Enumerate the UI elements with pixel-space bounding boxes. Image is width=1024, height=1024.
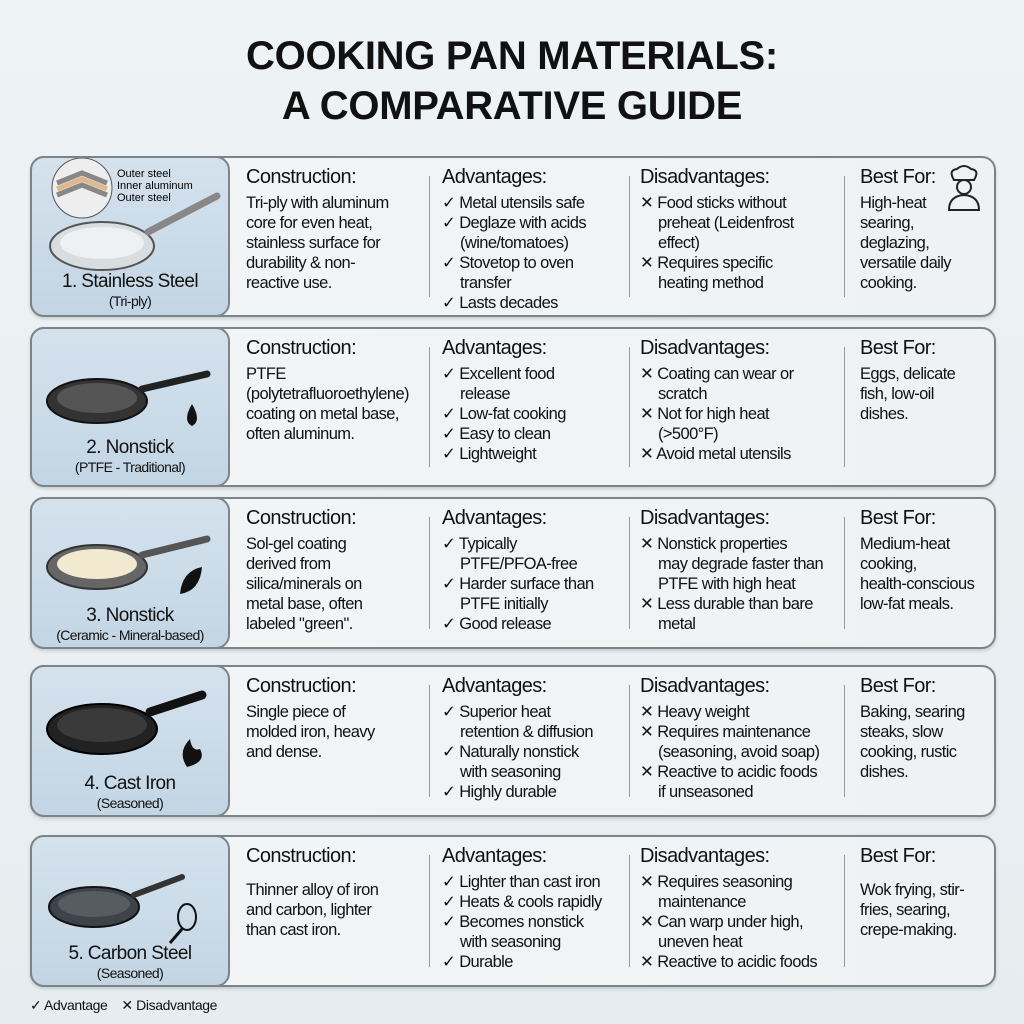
title: COOKING PAN MATERIALS: [246,34,778,78]
panel: nonstick PTFE: ✓ Low-fat cooking [442,405,566,423]
image: cast iron skillet: (Seasoned) [97,795,163,811]
panel: stainless steel: ✓ Stovetop to oven [442,254,573,272]
panel: nonstick PTFE: coating on metal base, [246,405,399,423]
image: carbon steel pan: 5. Carbon Steel [68,943,192,964]
panel: ceramic nonstick: Sol-gel coating [246,535,346,553]
panel: ceramic nonstick: ✓ Good release [442,615,551,633]
panel: nonstick PTFE: often aluminum. [246,425,354,443]
panel: cast iron: molded iron, heavy [246,723,375,741]
image: ceramic pan [30,497,230,649]
panel: carbon steel: maintenance [658,893,746,911]
panel: stainless steel: Advantages: [442,166,547,188]
panel: ceramic nonstick: PTFE with high heat [658,575,795,593]
image: stainless pan: 1. Stainless Steel [62,271,198,292]
panel: ceramic nonstick: metal base, often [246,595,362,613]
panel: cast iron: Construction: [246,675,356,697]
icon: chef [948,165,980,211]
panel: stainless steel: core for even heat, [246,214,372,232]
panel: stainless steel: transfer [460,274,511,292]
panel: ceramic nonstick: ✕ Less durable than bare [640,595,813,613]
panel: ceramic nonstick: PTFE initially [460,595,548,613]
image: ceramic pan: 3. Nonstick [86,605,174,626]
panel: cast iron: retention & diffusion [460,723,593,741]
panel: ceramic nonstick: Medium-heat [860,535,950,553]
panel: ceramic nonstick: Disadvantages: [640,507,769,529]
panel: nonstick PTFE: scratch [658,385,707,403]
panel: carbon steel: ✓ Durable [442,953,513,971]
panel: carbon steel [30,835,996,987]
panel: nonstick PTFE [30,327,996,487]
image: stainless pan: (Tri-ply) [109,293,151,309]
panel: ceramic nonstick: cooking, [860,555,917,573]
panel: carbon steel: and carbon, lighter [246,901,371,919]
panel: cast iron: cooking, rustic [860,743,956,761]
title: A COMPARATIVE GUIDE [282,84,742,128]
panel: cast iron: ✕ Heavy weight [640,703,749,721]
image: stainless pan: Outer steel [117,168,171,180]
panel: ceramic nonstick: ✓ Harder surface than [442,575,594,593]
panel: stainless steel: Best For: [860,166,936,188]
panel: carbon steel: than cast iron. [246,921,341,939]
panel: carbon steel: ✕ Can warp under high, [640,913,803,931]
panel: carbon steel: fries, searing, [860,901,950,919]
panel: ceramic nonstick: Construction: [246,507,356,529]
panel: stainless steel: durability & non- [246,254,355,272]
panel: stainless steel: cooking. [860,274,917,292]
panel: carbon steel: Disadvantages: [640,845,769,867]
panel: stainless steel: ✕ Requires specific [640,254,773,272]
panel: ceramic nonstick: low-fat meals. [860,595,953,613]
panel: nonstick PTFE: ✕ Coating can wear or [640,365,793,383]
panel: nonstick PTFE: Advantages: [442,337,547,359]
panel: cast iron: and dense. [246,743,322,761]
panel: ceramic nonstick: labeled "green". [246,615,353,633]
panel: cast iron: (seasoning, avoid soap) [658,743,819,761]
panel: nonstick PTFE: release [460,385,510,403]
image: stainless pan: Outer steel [117,192,171,204]
panel: cast iron: ✓ Superior heat [442,703,550,721]
panel: cast iron [30,665,996,817]
panel: nonstick PTFE: ✓ Lightweight [442,445,536,463]
image: black nonstick pan: (PTFE - Traditional) [75,459,185,475]
panel: ceramic nonstick: ✓ Typically [442,535,517,553]
panel: ceramic nonstick: may degrade faster than [658,555,823,573]
panel: stainless steel: searing, [860,214,914,232]
panel: cast iron: Single piece of [246,703,345,721]
panel: stainless steel: deglazing, [860,234,929,252]
panel: ceramic nonstick: PTFE/PFOA-free [460,555,577,573]
panel: ceramic nonstick [30,497,996,649]
panel: stainless steel: effect) [658,234,699,252]
image: black nonstick pan [30,327,230,487]
panel: stainless steel: Tri-ply with aluminum [246,194,389,212]
panel: cast iron: Disadvantages: [640,675,769,697]
panel: nonstick PTFE: fish, low-oil [860,385,934,403]
panel: cast iron: ✓ Naturally nonstick [442,743,579,761]
panel: ceramic nonstick: silica/minerals on [246,575,362,593]
panel: nonstick PTFE: ✕ Avoid metal utensils [640,445,791,463]
panel: stainless steel: preheat (Leidenfrost [658,214,794,232]
title [246,34,778,128]
panel: cast iron: dishes. [860,763,908,781]
panel: carbon steel: Wok frying, stir- [860,881,964,899]
panel: carbon steel: uneven heat [658,933,742,951]
panel: carbon steel: with seasoning [460,933,561,951]
panel: cast iron: Advantages: [442,675,547,697]
panel: carbon steel: Construction: [246,845,356,867]
image: cast iron skillet: 4. Cast Iron [84,773,176,794]
panel: nonstick PTFE: Construction: [246,337,356,359]
panel: cast iron: with seasoning [460,763,561,781]
panel: ceramic nonstick: Best For: [860,507,936,529]
image: cast iron skillet [30,665,230,817]
panel: ceramic nonstick: Advantages: [442,507,547,529]
panel: stainless steel: ✓ Deglaze with acids [442,214,586,232]
panel: nonstick PTFE: dishes. [860,405,908,423]
panel: carbon steel: crepe-making. [860,921,957,939]
panel: carbon steel: Best For: [860,845,936,867]
panel: carbon steel: Thinner alloy of iron [246,881,378,899]
panel: cast iron: steaks, slow [860,723,943,741]
panel: stainless steel: stainless surface for [246,234,380,252]
panel: nonstick PTFE: (polytetrafluoroethylene) [246,385,409,403]
panel: carbon steel: ✕ Reactive to acidic foods [640,953,817,971]
legend: ✓ Advantage ✕ Disadvantage [30,997,217,1013]
panel: cast iron: Best For: [860,675,936,697]
image: carbon steel pan [30,835,230,987]
image: carbon steel pan: (Seasoned) [97,965,163,981]
panel: carbon steel: ✓ Heats & cools rapidly [442,893,602,911]
panel: cast iron: ✓ Highly durable [442,783,556,801]
panel: stainless steel: ✓ Lasts decades [442,294,558,312]
panel: nonstick PTFE: ✕ Not for high heat [640,405,769,423]
image: stainless pan [30,156,230,317]
image: stainless pan: Inner aluminum [117,180,193,192]
panel: ceramic nonstick: derived from [246,555,331,573]
panel: carbon steel: ✕ Requires seasoning [640,873,792,891]
panel: cast iron: if unseasoned [658,783,753,801]
panel: nonstick PTFE: Disadvantages: [640,337,769,359]
panel: nonstick PTFE: ✓ Excellent food [442,365,554,383]
panel: carbon steel: ✓ Lighter than cast iron [442,873,600,891]
panel: cast iron: ✕ Requires maintenance [640,723,810,741]
panel: carbon steel: Advantages: [442,845,547,867]
panel: nonstick PTFE: ✓ Easy to clean [442,425,550,443]
panel: stainless steel: Construction: [246,166,356,188]
panel: stainless steel: High-heat [860,194,926,212]
panel: nonstick PTFE: (>500°F) [658,425,718,443]
panel: carbon steel: ✓ Becomes nonstick [442,913,584,931]
panel: nonstick PTFE: Best For: [860,337,936,359]
panel: cast iron: Baking, searing [860,703,965,721]
panel: stainless steel: reactive use. [246,274,332,292]
panel: ceramic nonstick: metal [658,615,695,633]
panel: stainless steel: heating method [658,274,763,292]
image: ceramic pan: (Ceramic - Mineral-based) [56,627,204,643]
panel: nonstick PTFE: PTFE [246,365,286,383]
panel: stainless steel [30,156,996,317]
panel: nonstick PTFE: Eggs, delicate [860,365,955,383]
panel: ceramic nonstick: ✕ Nonstick properties [640,535,787,553]
panel: ceramic nonstick: health-conscious [860,575,974,593]
panel: stainless steel: Disadvantages: [640,166,769,188]
panel: stainless steel: (wine/tomatoes) [460,234,568,252]
panel: stainless steel: versatile daily [860,254,951,272]
panel: stainless steel: ✓ Metal utensils safe [442,194,584,212]
panel: cast iron: ✕ Reactive to acidic foods [640,763,817,781]
panel: stainless steel: ✕ Food sticks without [640,194,786,212]
image: black nonstick pan: 2. Nonstick [86,437,174,458]
